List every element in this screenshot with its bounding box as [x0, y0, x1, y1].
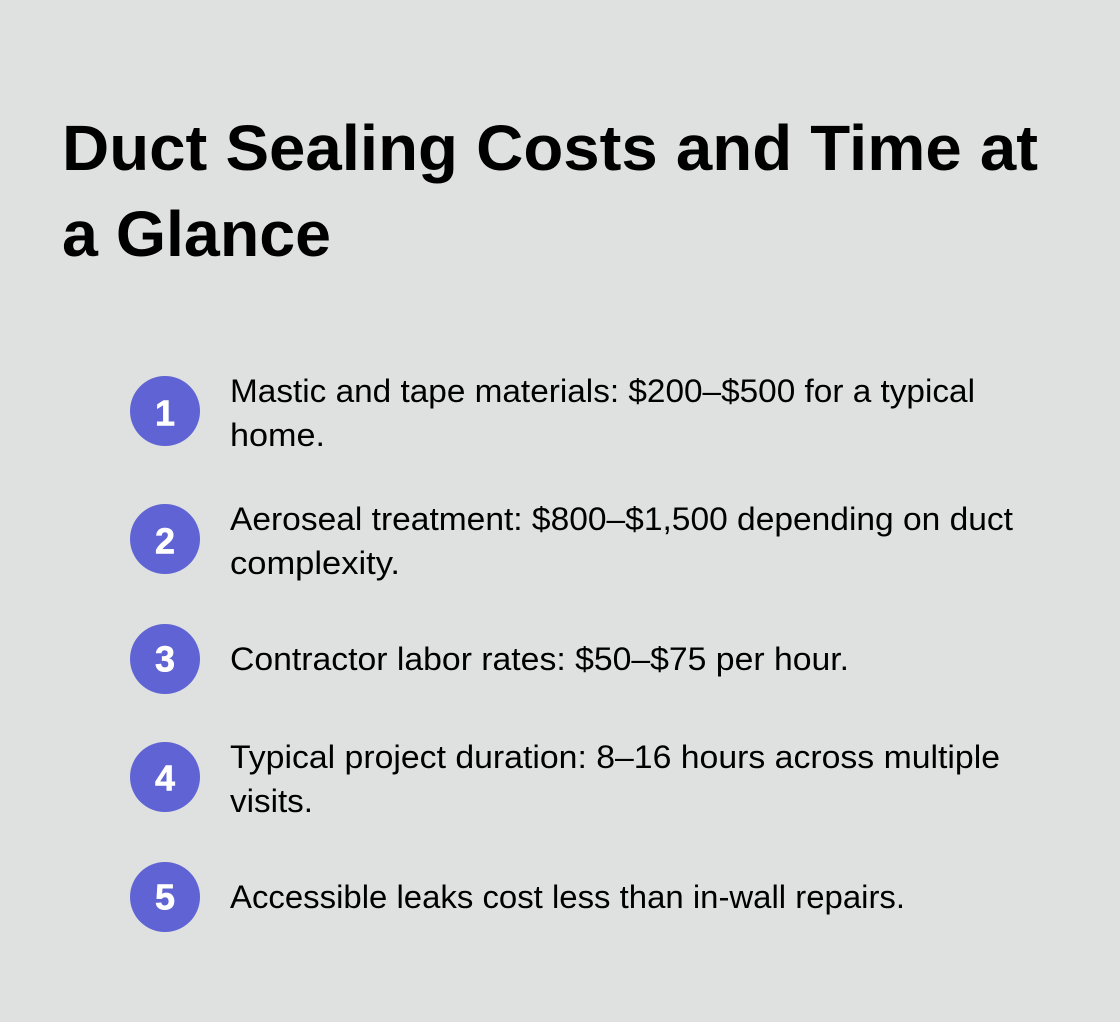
item 3 — [130, 624, 849, 694]
number badge 1 — [130, 376, 200, 446]
number badge 4: 4 — [155, 758, 175, 798]
title: a Glance — [62, 198, 331, 270]
number badge 3: 3 — [155, 638, 175, 680]
item 2 — [130, 501, 1013, 581]
item 5 text: Accessible leaks cost less than in-wall repairs. — [230, 879, 905, 915]
number badge 4 — [130, 742, 200, 812]
item 1 text: home. — [230, 417, 325, 453]
number badge 2: 2 — [155, 520, 175, 562]
list of cost and time items — [130, 373, 1013, 932]
number badge 1: 1 — [155, 392, 175, 434]
item 1 text — [230, 373, 975, 453]
item 3 text: Contractor labor rates: $50–$75 per hour. — [230, 641, 849, 677]
item 5 — [130, 862, 905, 932]
number badge 5 — [130, 862, 200, 932]
number badge 2 — [130, 504, 200, 574]
item 1 text: Mastic and tape materials: $200–$500 for a typical — [230, 373, 975, 409]
item 4 text: visits. — [230, 783, 313, 819]
number badge 3 — [130, 624, 200, 694]
item 2 text: complexity. — [230, 545, 400, 581]
item 1 — [130, 373, 975, 453]
item 4 text: Typical project duration: 8–16 hours across multiple — [230, 739, 1000, 775]
item 2 text: Aeroseal treatment: $800–$1,500 depending on duct — [230, 501, 1013, 537]
item 2 text — [230, 501, 1013, 581]
item 4 text — [230, 739, 1000, 819]
title: Duct Sealing Costs and Time at — [62, 112, 1038, 184]
number badge 5: 5 — [155, 876, 175, 918]
title — [62, 112, 1038, 270]
item 4 — [130, 739, 1000, 819]
